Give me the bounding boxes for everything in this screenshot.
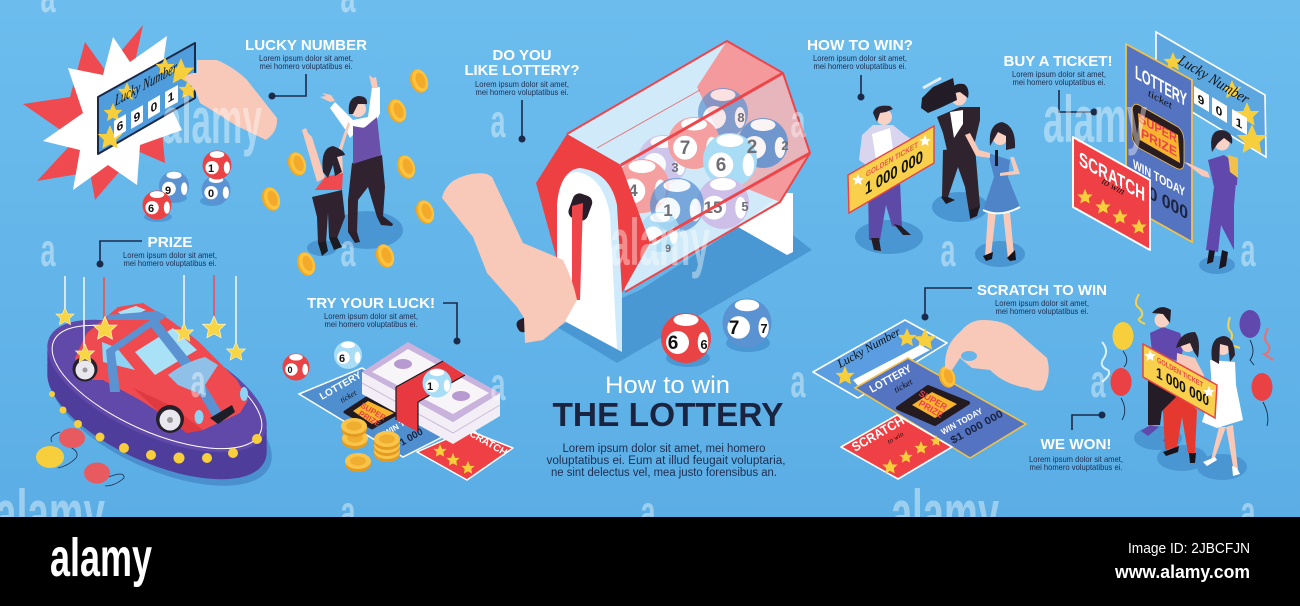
balls: 0: [287, 365, 293, 375]
coins scattered: [259, 67, 437, 278]
main heading: THE LOTTERY: [552, 396, 784, 433]
woman in white: [1202, 336, 1243, 476]
lucky card: [813, 320, 947, 398]
label: scratch to win: SCRATCH TO WIN: [977, 282, 1107, 299]
main heading: [552, 372, 784, 433]
drum balls: 15: [704, 198, 722, 217]
label: we won: [1029, 412, 1123, 472]
lucky number display: 0: [1216, 102, 1222, 120]
balls below machine: 7: [729, 318, 739, 339]
hanging stars: [56, 275, 245, 362]
illustration: scratch cards with hand and coin: [813, 320, 1049, 479]
drum balls: 5: [741, 199, 749, 214]
front stand: [557, 168, 622, 352]
coin stacks: [341, 418, 400, 472]
label: prize: Lorem ipsum dolor sit amet,: [123, 250, 217, 260]
lotto balls top left: 6: [148, 203, 154, 215]
stage: [29, 292, 291, 514]
drum balls: 4: [628, 181, 638, 200]
drum balls: 2: [781, 138, 789, 153]
label: how to win: mei homero voluptatibus ei.: [814, 61, 906, 71]
label: scratch to win: [922, 282, 1107, 320]
illustration: happy couple with coins: [302, 75, 403, 256]
machine shadow: [557, 225, 812, 363]
lottery ticket: 1 000: [398, 426, 426, 449]
drum balls: 6: [716, 155, 726, 176]
intro paragraph: ne sint delectus vel, mea justo forensibus an.: [551, 467, 777, 479]
lucky number card: 0: [151, 98, 157, 116]
lucky number card: 1: [168, 88, 174, 106]
label: do you like lottery: Lorem ipsum dolor sit amet,: [475, 79, 569, 89]
label: try your luck: [307, 295, 460, 344]
balls: [282, 341, 452, 398]
lucky number display: 1: [1236, 114, 1242, 132]
illustration: lottery machine: [442, 41, 812, 363]
label: try your luck: Lorem ipsum dolor sit amet,: [324, 311, 418, 321]
lottery ticket: ticket: [338, 388, 359, 405]
watermarks: alamy: [610, 205, 710, 279]
label: we won: Lorem ipsum dolor sit amet,: [1029, 454, 1123, 464]
balls below machine: 6: [700, 337, 708, 352]
watermarks: a: [490, 358, 506, 410]
lucky card: Lucky Number: [834, 324, 903, 371]
lottery ticket: [299, 368, 460, 457]
red burst: [23, 25, 165, 200]
lottery ticket display: LOTTERY: [1135, 62, 1187, 112]
man with ticket: [848, 106, 934, 251]
watermarks: alamy: [891, 476, 999, 550]
illustration: tv interview: [848, 78, 1025, 267]
scratch card display: to win: [1100, 176, 1127, 198]
label: we won: mei homero voluptatibus ei.: [1030, 462, 1122, 472]
label: do you like lottery: [464, 47, 580, 142]
lotto balls top left: [142, 150, 232, 222]
label: prize: [96, 234, 217, 268]
lottery card: PRIZE: [917, 398, 945, 420]
label: lucky number: [245, 37, 367, 100]
label: do you like lottery: LIKE LOTTERY?: [464, 62, 580, 79]
lotto balls top left: 9: [165, 185, 171, 197]
alamy logo: alamy: [50, 528, 152, 588]
red scratch card: [841, 413, 952, 479]
illustration: car on stage: [29, 275, 291, 514]
label: buy a ticket: Lorem ipsum dolor sit amet,: [1012, 69, 1106, 79]
back stand: [738, 193, 793, 255]
label: do you like lottery: mei homero voluptatibus ei.: [476, 87, 568, 97]
drum balls: 1: [663, 201, 673, 220]
hand with coin: [936, 320, 1049, 391]
label: buy a ticket: [1004, 53, 1112, 116]
golden ticket sign: GOLDEN TICKET: [1157, 355, 1203, 389]
watermarks: alamy: [1043, 82, 1147, 156]
lucky number display: 9: [1198, 91, 1204, 109]
streamers: [1102, 294, 1273, 382]
crank: [515, 191, 594, 334]
lotto balls top left: 0: [208, 188, 214, 200]
golden ticket sign: 1 000 000: [1156, 364, 1209, 410]
reporter: [965, 122, 1020, 261]
man: [1141, 307, 1184, 446]
woman: [302, 122, 350, 256]
label: prize: mei homero voluptatibus ei.: [124, 258, 216, 268]
watermarks: alamy: [162, 83, 262, 157]
watermarks: a: [790, 355, 806, 407]
label: lucky number: Lorem ipsum dolor sit amet,: [259, 53, 353, 63]
illustration: lucky number burst with card and hand: [23, 25, 277, 200]
lottery ticket display: PRIZE: [1141, 125, 1177, 160]
watermarks: a: [940, 224, 956, 276]
balls: 1: [427, 381, 433, 393]
lottery card: $1 000 000: [949, 408, 1005, 447]
label: how to win: Lorem ipsum dolor sit amet,: [813, 53, 907, 63]
intro paragraph: voluptatibus ei. Eum at illud feugait voluptaria,: [546, 455, 786, 467]
lucky number display: [1156, 32, 1267, 157]
balls below machine: 7: [760, 321, 768, 336]
party balloons: [36, 428, 124, 486]
label: lucky number: LUCKY NUMBER: [245, 37, 367, 54]
golden ticket sign: GOLDEN TICKET: [866, 139, 919, 179]
camera operator: [921, 78, 980, 219]
lucky number display: Lucky Number: [1174, 52, 1252, 108]
website: www.alamy.com: [1114, 562, 1250, 582]
illustration: ticket displays and presenter: [1073, 32, 1267, 274]
drum balls: 3: [671, 160, 679, 175]
label: we won: WE WON!: [1040, 436, 1112, 453]
balls below machine: [661, 298, 772, 367]
label: try your luck: TRY YOUR LUCK!: [307, 295, 435, 312]
label: prize: PRIZE: [148, 234, 192, 251]
label: scratch to win: Lorem ipsum dolor sit amet,: [995, 298, 1089, 308]
golden ticket sign: 1 000 000: [865, 146, 923, 199]
illustration: tickets, money and coins: [282, 341, 513, 480]
footer bar: [0, 517, 1300, 606]
woman in red: [1163, 332, 1204, 463]
scratch card display: [1073, 137, 1150, 250]
golden ticket sign: [1143, 344, 1217, 418]
lottery ticket: SUPER: [359, 401, 388, 423]
lotto balls top left: 1: [208, 163, 214, 175]
car: [72, 303, 248, 433]
lottery card: SUPER: [917, 388, 949, 412]
hand on crank: [442, 173, 577, 343]
drum balls: 7: [680, 138, 690, 159]
balls: 6: [339, 353, 345, 365]
label: buy a ticket: mei homero voluptatibus ei.: [1012, 77, 1106, 87]
watermarks: a: [490, 95, 506, 147]
lottery ticket display: [1118, 44, 1192, 242]
lottery card: ticket: [892, 376, 914, 395]
lucky number card: Lucky Number: [114, 58, 177, 110]
watermarks: a: [340, 486, 356, 538]
drum balls: 8: [737, 110, 745, 125]
illustration: winners with balloons: [1102, 294, 1273, 480]
lottery ticket display: WIN TODAY: [1133, 156, 1185, 200]
watermarks: a: [1090, 355, 1106, 407]
lottery ticket display: ticket: [1148, 86, 1172, 112]
drum balls: [615, 88, 789, 255]
watermarks: a: [40, 224, 56, 276]
money stack: [362, 342, 500, 444]
lucky number card: 6: [117, 117, 123, 135]
watermarks: alamy: [0, 476, 105, 550]
golden ticket sign: [848, 126, 934, 213]
drum body: [567, 41, 810, 292]
watermarks: a: [340, 224, 356, 276]
drum frame: [567, 41, 810, 292]
image id: Image ID: 2JBCFJN: [1128, 540, 1250, 557]
scratch card: SCRATCH: [462, 425, 509, 459]
label: how to win: [807, 37, 913, 100]
drum balls: 2: [747, 137, 757, 158]
watermarks: a: [190, 355, 206, 407]
lottery card: WIN TODAY: [939, 406, 984, 437]
balloons: [1110, 310, 1272, 426]
scratch card display: SCRATCH: [1079, 147, 1145, 206]
lottery ticket: PRIZE: [357, 409, 382, 429]
lottery ticket: WIN TOD: [382, 413, 417, 438]
red scratch card: SCRATCH: [849, 413, 907, 455]
lottery ticket display: SUPER: [1139, 110, 1177, 146]
main heading: How to win: [605, 372, 730, 399]
lucky number card: 9: [134, 108, 140, 126]
lottery card: [855, 358, 1026, 458]
label: scratch to win: mei homero voluptatibus ei.: [996, 306, 1088, 316]
intro paragraph: Lorem ipsum dolor sit amet, mei homero: [562, 443, 766, 455]
label: how to win: HOW TO WIN?: [807, 37, 913, 54]
presenter woman: [1184, 130, 1238, 274]
label: do you like lottery: DO YOU: [492, 47, 552, 64]
lucky number card: [98, 43, 198, 154]
intro paragraph: [546, 443, 786, 479]
lottery card: LOTTERY: [868, 363, 914, 396]
label: try your luck: mei homero voluptatibus ei.: [324, 319, 418, 329]
watermarks: a: [640, 486, 656, 538]
lottery ticket display: 1 000 000: [1118, 166, 1188, 224]
man: [320, 75, 393, 243]
balls below machine: 6: [668, 333, 678, 354]
label: lucky number: mei homero voluptatibus ei.: [260, 61, 352, 71]
red end cap: [536, 134, 650, 293]
watermarks: a: [790, 95, 806, 147]
red scratch card: to win: [886, 430, 905, 446]
drum balls: 9: [665, 243, 671, 255]
scratch card: [417, 425, 513, 480]
label: buy a ticket: BUY A TICKET!: [1004, 53, 1112, 70]
hand: [184, 60, 277, 140]
watermarks: a: [1240, 486, 1256, 538]
white burst: [43, 36, 182, 190]
lottery ticket: LOTTERY: [318, 370, 364, 403]
watermarks: a: [1240, 224, 1256, 276]
